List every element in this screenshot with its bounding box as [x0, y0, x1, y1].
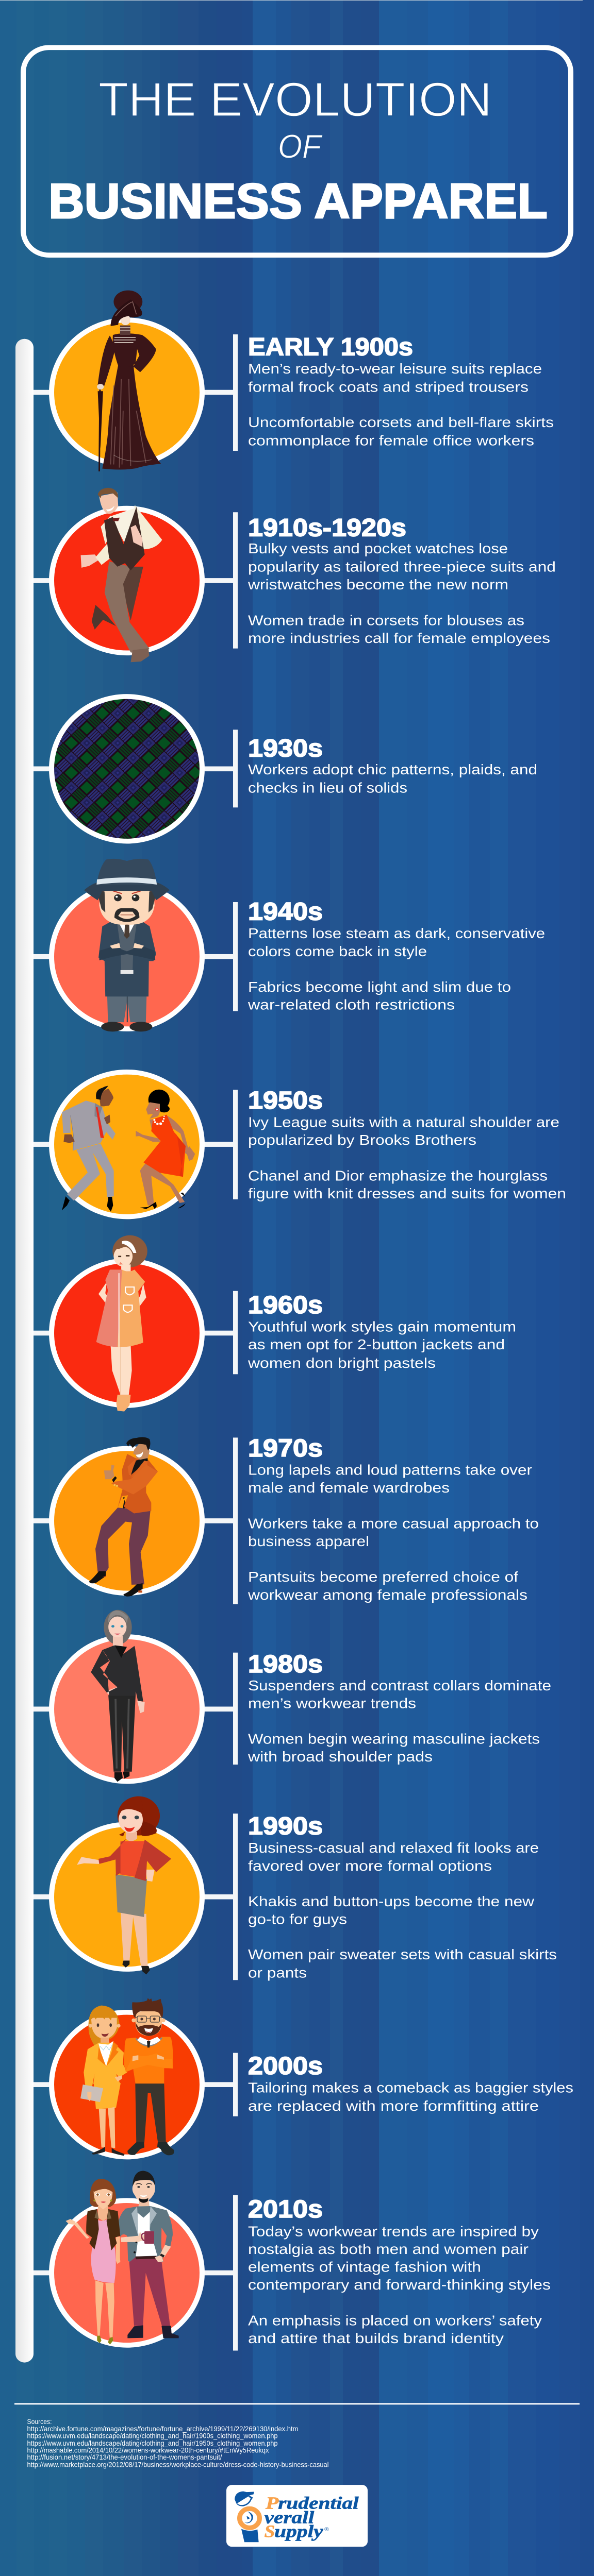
text: 1990s: Khakis and button-ups become the new — [248, 1893, 535, 1910]
text: 1970s — [248, 1462, 539, 1603]
logo: Prudential Overall Supply: ® — [324, 2527, 329, 2533]
divider bar — [233, 1090, 238, 1199]
text: 1990s: or pants — [248, 1965, 307, 1981]
logo: Prudential Overall Supply: upply — [274, 2522, 324, 2541]
heading: 2000s: 2000s — [248, 2053, 323, 2080]
text: 1980s: with broad shoulder pads — [248, 1749, 433, 1765]
text: early 1900s: commonplace for female office workers — [248, 433, 534, 449]
panel: 1910s-1920s — [34, 488, 556, 662]
text: 1960s: Youthful work styles gain momentum — [248, 1319, 516, 1335]
heading: 1980s: 1980s — [248, 1651, 323, 1678]
text: 1970s: workwear among female professionals — [248, 1587, 527, 1603]
heading: 1960s: 1960s — [248, 1292, 323, 1319]
text: 1950s: Chanel and Dior emphasize the hourglass — [248, 1168, 548, 1184]
heading: 1940s: 1940s — [248, 898, 323, 925]
text: 1910s-1920s — [248, 541, 556, 647]
text: early 1900s — [248, 361, 554, 449]
text: 1910s-1920s: popularity as tailored three-piece suits and — [248, 559, 556, 575]
text: 1930s: Workers adopt chic patterns, plaids, and — [248, 761, 537, 778]
panel: 1940s — [34, 859, 545, 1031]
sources: https://www.uvm.edu/landscape/dating/clothing_and_hair/1950s_clothing_women.php — [27, 2439, 278, 2448]
circle: 1950s — [52, 1072, 202, 1217]
text: 1910s-1920s: more industries call for female employees — [248, 631, 550, 647]
icon: 1960s woman in shift dress — [96, 1235, 147, 1412]
circle: 1990s — [52, 1824, 202, 1969]
text: 1950s: figure with knit dresses and suits for women — [248, 1185, 566, 1202]
panel: 1960s — [34, 1235, 516, 1412]
icon: 1980s woman in black pantsuit — [91, 1610, 145, 1782]
text: 1910s-1920s: wristwatches become the new norm — [248, 577, 508, 593]
text: 2010s: and attire that builds brand identity — [248, 2331, 504, 2347]
circle: plaid pattern — [52, 697, 202, 841]
logo: Prudential Overall Supply: verall — [265, 2509, 315, 2527]
divider bar — [233, 1437, 238, 1604]
divider bar — [233, 2195, 238, 2350]
sources: Sources: — [27, 2418, 52, 2426]
divider bar — [233, 730, 238, 807]
sources: https://www.uvm.edu/landscape/dating/clothing_and_hair/1900s_clothing_women.php — [27, 2432, 278, 2441]
text: early 1900s: Men’s ready-to-wear leisure suits replace — [248, 361, 542, 377]
sources: http://mashable.com/2014/10/22/womens-workwear-20th-century/#tEnWy5Reukqx — [27, 2447, 269, 2454]
sources: http://www.marketplace.org/2012/08/17/business/workplace-culture/dress-code-history-business-casual — [27, 2461, 329, 2469]
panel: 2000s — [34, 1998, 573, 2157]
text: early 1900s: Uncomfortable corsets and bell-flare skirts — [248, 414, 554, 431]
panel: 1970s — [34, 1435, 539, 1604]
text: 1960s — [248, 1319, 516, 1371]
panel: early 1900s — [34, 291, 554, 471]
text: early 1900s: formal frock coats and striped trousers — [248, 379, 529, 395]
text: 1940s: Patterns lose steam as dark, conservative — [248, 926, 545, 942]
text: 1950s: Ivy League suits with a natural shoulder are — [248, 1114, 559, 1130]
text: 1950s: popularized by Brooks Brothers — [248, 1132, 476, 1148]
text: 1930s: checks in lieu of solids — [248, 780, 407, 796]
text: 1940s — [248, 926, 545, 1013]
text: 1930s — [248, 761, 537, 796]
divider bar — [233, 902, 238, 1011]
text: 1990s: favored over more formal options — [248, 1858, 492, 1874]
circle: 1910s-1920s — [52, 509, 202, 653]
panel: 1980s — [34, 1610, 551, 1782]
logo: Prudential Overall Supply — [226, 2485, 368, 2547]
heading: 1950s: 1950s — [248, 1087, 323, 1114]
text: 1970s: Long lapels and loud patterns take over — [248, 1462, 532, 1478]
circle: 1960s — [52, 1261, 202, 1405]
divider bar — [233, 1814, 238, 1980]
divider bar — [233, 2053, 238, 2116]
text: 1960s: as men opt for 2-button jackets and — [248, 1337, 505, 1353]
panel: 1990s — [34, 1797, 557, 1981]
heading: 1970s: 1970s — [248, 1435, 323, 1462]
text: 1960s: women don bright pastels — [248, 1355, 436, 1371]
sources — [27, 2418, 329, 2469]
text: 2000s — [248, 2080, 573, 2114]
icon: 1950s dancing couple — [62, 1086, 195, 1212]
icon: 2000s couple in orange — [80, 1998, 174, 2156]
title box — [23, 47, 571, 255]
circle: 2010s — [52, 2200, 202, 2345]
timeline rail — [15, 339, 34, 2363]
text: 1970s: business apparel — [248, 1533, 369, 1550]
circle: 1980s — [52, 1637, 202, 1782]
icon: 1990s woman in cardigan and skirt — [77, 1797, 171, 1974]
text: 1980s: Women begin wearing masculine jackets — [248, 1731, 540, 1747]
text: 1980s — [248, 1677, 551, 1765]
text: 2010s: An emphasis is placed on workers’ safety — [248, 2313, 542, 2329]
text: 1970s: Workers take a more casual approach to — [248, 1516, 539, 1532]
icon: man in fedora and overcoat — [84, 859, 170, 1031]
heading: 1910s-1920s: 1910s-1920s — [248, 514, 406, 541]
logo: Prudential Overall Supply: P — [265, 2494, 279, 2513]
text: 2000s: Tailoring makes a comeback as baggier styles — [248, 2080, 573, 2096]
divider bar — [233, 512, 238, 649]
circle: 1970s — [52, 1449, 202, 1593]
text: 1970s: Pantsuits become preferred choice of — [248, 1569, 518, 1585]
text: 1910s-1920s: Bulky vests and pocket watches lose — [248, 541, 508, 557]
circle: 2000s — [52, 2012, 202, 2157]
panel: 1930s — [34, 697, 537, 841]
logo: Prudential Overall Supply: rudential — [278, 2494, 359, 2513]
text: 2010s: Today’s workwear trends are inspired by — [248, 2224, 539, 2240]
heading: early 1900s: EARLY 1900s — [248, 333, 413, 361]
logo: Prudential Overall Supply: S — [265, 2522, 275, 2541]
icon: 1970s man with thumbs up — [89, 1437, 158, 1597]
text: 2010s — [248, 2224, 551, 2347]
panel: 1950s — [34, 1072, 566, 1217]
divider bar — [233, 1291, 238, 1374]
title line: Business Apparel: BUSINESS APPAREL — [48, 174, 548, 229]
divider bar — [233, 1653, 238, 1765]
text: 2000s: are replaced with more formfitting attire — [248, 2098, 539, 2114]
title line: The Evolution: THE EVOLUTION — [98, 73, 492, 127]
title line: of: OF — [278, 128, 323, 165]
circle: early 1900s — [52, 320, 202, 465]
text: 1990s — [248, 1840, 557, 1981]
sources: http://fusion.net/story/4713/the-evolution-of-the-womens-pantsuit/ — [27, 2453, 222, 2462]
text: 1990s: go-to for guys — [248, 1911, 347, 1927]
text: 1990s: Women pair sweater sets with casual skirts — [248, 1946, 557, 1963]
divider bar — [233, 334, 238, 451]
text: 1970s: male and female wardrobes — [248, 1480, 450, 1496]
heading: 1930s: 1930s — [248, 735, 323, 762]
text: 1980s: men’s workwear trends — [248, 1696, 416, 1711]
panel: 2010s — [34, 2171, 551, 2350]
text: 2010s: nostalgia as both men and women pair — [248, 2241, 529, 2258]
text: 1950s — [248, 1114, 566, 1202]
text: 1980s: Suspenders and contrast collars dominate — [248, 1677, 551, 1694]
icon: dancing man in vest — [80, 488, 162, 662]
text: 2010s: elements of vintage fashion with — [248, 2259, 481, 2275]
circle: 1940s — [52, 884, 202, 1029]
icon: Victorian lady with umbrella — [97, 291, 161, 471]
text: 1940s: war-related cloth restrictions — [248, 997, 455, 1013]
sources: http://archive.fortune.com/magazines/fortune/fortune_archive/1999/11/22/269130/index.htm — [27, 2425, 298, 2433]
icon: 2010s couple with coffee mug — [65, 2171, 179, 2345]
text: 2010s: contemporary and forward-thinking styles — [248, 2277, 551, 2293]
text: 1910s-1920s: Women trade in corsets for blouses as — [248, 613, 524, 629]
text: 1940s: Fabrics become light and slim due to — [248, 979, 511, 995]
heading: 1990s: 1990s — [248, 1812, 323, 1840]
heading: 2010s: 2010s — [248, 2196, 323, 2223]
text: 1940s: colors come back in style — [248, 943, 427, 960]
text: 1990s: Business-casual and relaxed fit looks are — [248, 1840, 539, 1856]
